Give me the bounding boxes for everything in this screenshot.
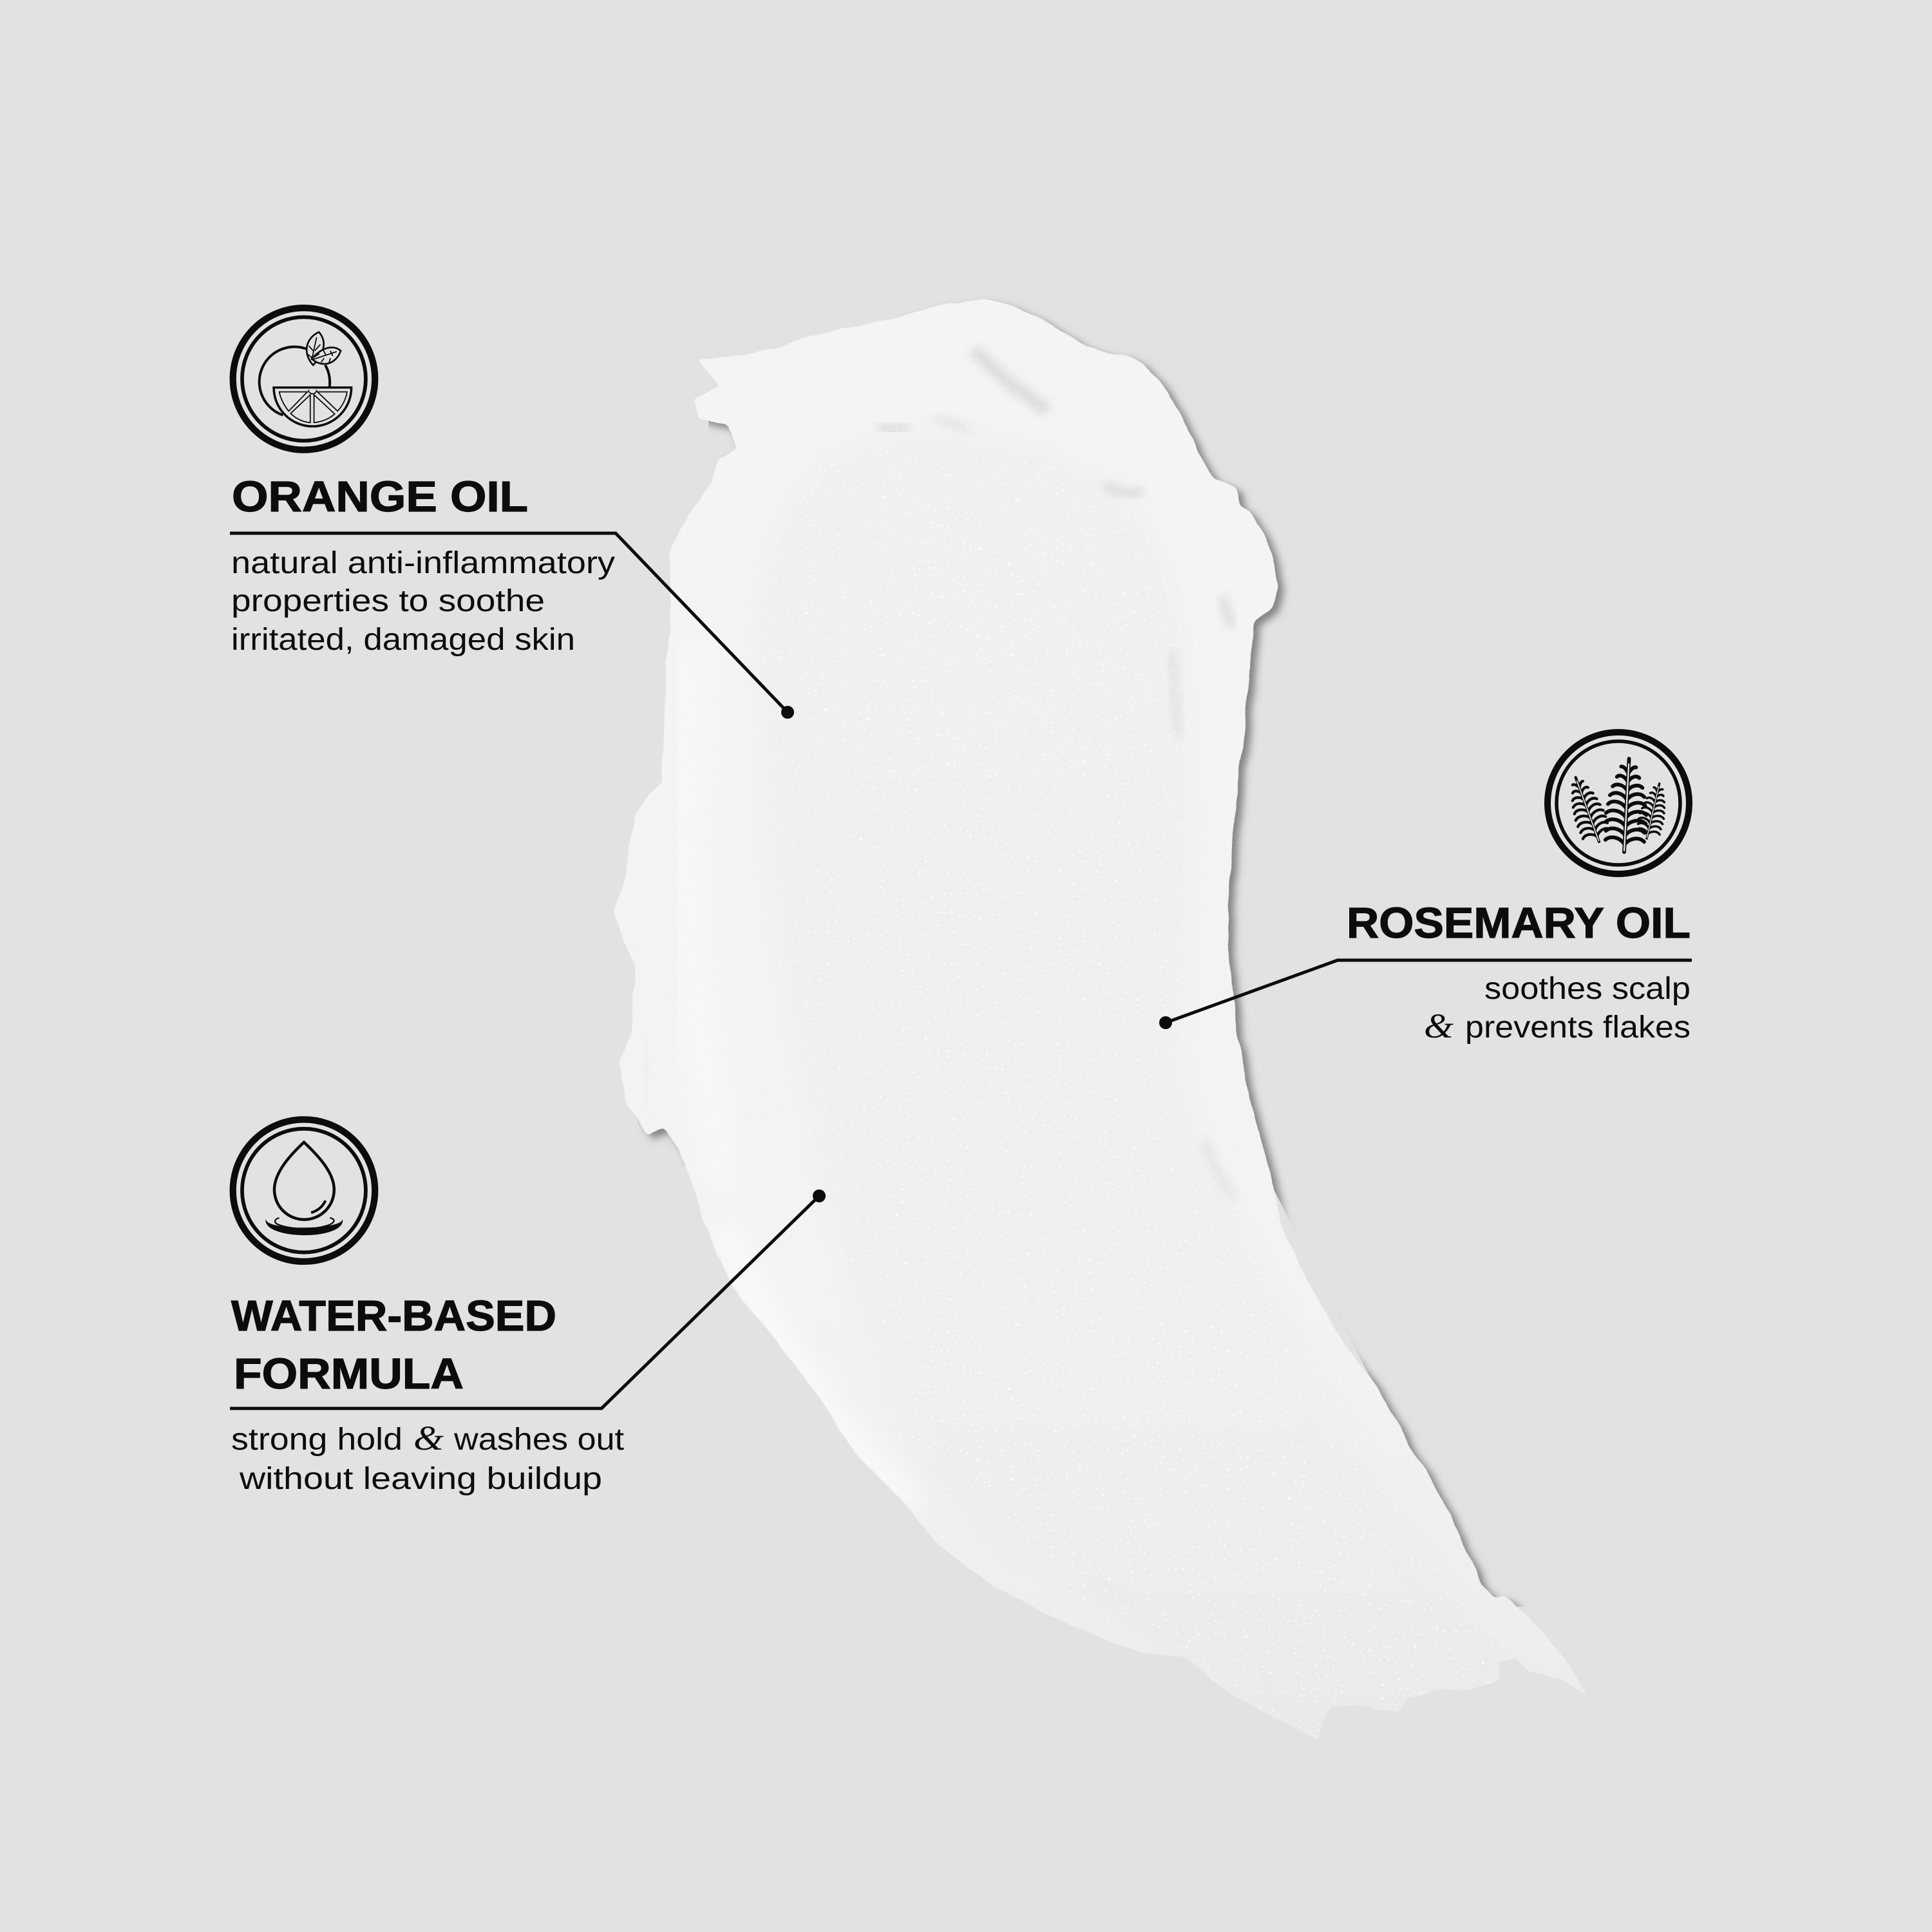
description: rosemary oil: soothes scalp: [1484, 972, 1690, 1006]
description: orange oil: irritated, damaged skin: [231, 623, 575, 657]
heading: orange oil: ORANGE OIL: [232, 473, 528, 521]
cream swatch: [612, 296, 1597, 1752]
callout: rosemary oil: [1159, 732, 1692, 1045]
callout: water-based formula: [230, 1119, 826, 1496]
description: rosemary oil: [1424, 972, 1690, 1045]
heading: water-based formula: WATER-BASED: [231, 1292, 556, 1340]
glitter specks: [612, 296, 1597, 1752]
leader line: rosemary oil: [1166, 960, 1692, 1023]
marker dot: orange oil: [781, 706, 794, 719]
leader line: orange oil: [230, 533, 788, 712]
icon: rosemary sprigs: [1548, 732, 1689, 874]
leader line: water-based formula: [230, 1196, 819, 1408]
description: rosemary oil: prevents flakes: [1465, 1010, 1690, 1045]
heading: water-based formula: [231, 1292, 556, 1398]
description: water-based formula: strong hold: [231, 1423, 402, 1457]
description: orange oil: properties to soothe: [231, 584, 545, 618]
marker dot: rosemary oil: [1159, 1016, 1172, 1029]
description: water-based formula: washes out: [453, 1423, 624, 1457]
icon: water drop: [233, 1119, 375, 1262]
callout: orange oil: [230, 308, 794, 719]
heading: water-based formula: FORMULA: [234, 1350, 464, 1398]
heading: rosemary oil: ROSEMARY OIL: [1347, 899, 1690, 947]
icon: orange with slice and leaves: [233, 308, 375, 450]
description: rosemary oil: &: [1424, 1007, 1454, 1045]
description: orange oil: natural anti-inflammatory: [231, 546, 615, 580]
description: water-based formula: without leaving buildup: [239, 1462, 602, 1496]
description: water-based formula: [231, 1419, 624, 1496]
description: orange oil: [231, 546, 615, 657]
marker dot: water-based formula: [813, 1189, 826, 1202]
description: water-based formula: &: [413, 1419, 444, 1457]
